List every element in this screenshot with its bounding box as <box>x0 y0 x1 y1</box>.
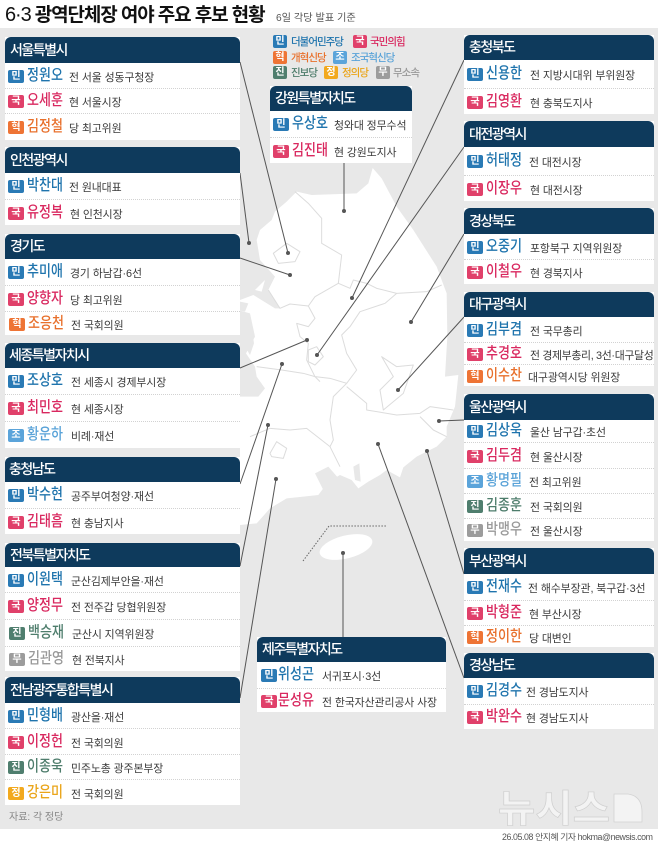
candidate: 이장우: 이장우 <box>486 180 522 196</box>
candidate: 김관영 <box>5 646 240 671</box>
candidate: 양향자: 당 최고위원 <box>70 294 123 306</box>
heading: 경기도 <box>5 234 240 259</box>
heading: 충청남도: 충청남도 <box>9 461 55 477</box>
candidate: 박찬대: 민 <box>11 181 21 192</box>
heading: 강원특별자치도: 강원특별자치도 <box>275 90 355 106</box>
candidate: 조상호 <box>8 372 166 389</box>
leader line: Chungbuk <box>350 60 464 300</box>
heading: 인천광역시: 인천광역시 <box>10 152 67 168</box>
candidate: 조상호: 조상호 <box>27 372 63 389</box>
candidate: 전재수 <box>467 578 645 595</box>
candidate: 백승재 <box>5 619 240 646</box>
candidate: 강은미: 정 <box>11 788 21 798</box>
candidate: 전재수: 민 <box>470 582 480 593</box>
candidate: 이수찬: 이수찬 <box>486 366 522 384</box>
heading: 전북특별자치도: 전북특별자치도 <box>10 547 90 563</box>
panel: 대전광역시 <box>464 121 654 201</box>
candidate: 박수현 <box>8 486 154 503</box>
leader line: Gyeonggi <box>240 258 292 277</box>
candidate: 이종욱: 진 <box>11 762 21 773</box>
legend: 정의당 <box>342 67 368 79</box>
candidate: 위성곤: 서귀포시·3선 <box>322 671 381 683</box>
candidate: 최민호 <box>5 394 240 421</box>
candidate: 오중기: 포항북구 지역위원장 <box>530 242 622 254</box>
heading: 서울특별시: 서울특별시 <box>10 42 67 58</box>
panel: 울산광역시 <box>464 394 654 541</box>
candidate: 문성유 <box>257 688 446 712</box>
candidate: 박형준: 박형준 <box>486 604 522 621</box>
candidate: 박찬대 <box>8 176 122 194</box>
legend: 정 <box>326 67 336 78</box>
candidate: 우상호: 민 <box>276 119 286 130</box>
candidate: 박맹우 <box>464 518 654 541</box>
candidate: 오중기 <box>467 238 622 254</box>
candidate: 박완수: 국 <box>470 712 480 723</box>
candidate: 김태흠: 현 충남지사 <box>71 518 124 530</box>
leader line: Seoul <box>240 62 290 255</box>
candidate: 김경수: 전 경남도지사 <box>526 687 588 699</box>
candidate: 박맹우: 전 울산시장 <box>530 526 583 538</box>
candidate: 이장우: 현 대전시장 <box>530 184 583 196</box>
candidate: 김관영: 김관영 <box>28 650 64 667</box>
candidate: 김영환 <box>464 88 654 114</box>
panel: 충청남도 <box>5 457 240 534</box>
candidate: 박형준: 국 <box>470 608 480 619</box>
panel: 제주특별자치도 <box>257 637 446 712</box>
legend: 조 <box>335 52 345 63</box>
candidate: 김부겸: 민 <box>470 324 480 336</box>
panel: 충청북도 <box>464 35 654 114</box>
panel: 강원특별자치도 <box>270 86 412 163</box>
heading: 전남광주통합특별시 <box>5 677 240 703</box>
candidate: 이수찬 <box>464 364 654 386</box>
panel: 전남광주통합특별시 <box>5 677 240 805</box>
candidate: 전재수: 전재수 <box>486 578 522 595</box>
candidate: 추경호: 추경호 <box>486 344 522 362</box>
heading: 충청남도 <box>5 457 240 482</box>
panel: 전북특별자치도 <box>5 543 240 671</box>
candidate: 박완수: 현 경남도지사 <box>526 713 588 725</box>
candidate: 양정무 <box>5 592 240 619</box>
candidate: 이철우: 이철우 <box>486 263 522 280</box>
heading: 세종특별자치시: 세종특별자치시 <box>9 347 89 363</box>
candidate: 오중기: 민 <box>470 242 480 252</box>
leader line: Jeonnam Gwangju <box>240 477 278 698</box>
candidate: 추경호: 국 <box>470 348 480 360</box>
candidate: 최민호: 국 <box>11 403 21 414</box>
leader line: Jeju <box>341 551 345 637</box>
candidate: 추미애 <box>8 263 142 280</box>
candidate: 민형배: 광산을·재선 <box>71 712 124 724</box>
heading: 강원특별자치도 <box>270 86 412 111</box>
heading: 경기도: 경기도 <box>10 238 44 254</box>
candidate: 강은미: 강은미 <box>27 784 63 800</box>
heading: 충청북도: 충청북도 <box>469 39 515 55</box>
heading: 경상북도 <box>464 208 654 234</box>
panel: 대구광역시 <box>464 292 654 386</box>
candidate: 정이한: 정이한 <box>486 628 522 644</box>
candidate: 조응천 <box>5 311 240 335</box>
legend: 조국혁신당 <box>351 52 394 64</box>
candidate: 조상호: 민 <box>11 376 21 387</box>
legend: 더불어민주당 <box>291 36 343 48</box>
candidate: 김상욱: 울산 남구갑·초선 <box>530 427 606 439</box>
heading: 울산광역시 <box>464 394 654 420</box>
candidate: 황운하 <box>5 421 240 448</box>
candidate: 김종훈: 전 국회의원 <box>530 502 583 514</box>
candidate: 오세훈: 국 <box>11 96 21 107</box>
candidate: 이수찬: 혁 <box>470 370 480 382</box>
candidate: 백승재: 군산시 지역위원장 <box>72 629 154 641</box>
candidate: 전재수: 전 해수부장관, 북구갑·3선 <box>528 583 645 595</box>
candidate: 조응천: 조응천 <box>28 314 64 332</box>
candidate: 김태흠: 국 <box>11 516 21 528</box>
candidate: 황운하: 조 <box>11 430 21 441</box>
panel: 경기도 <box>5 234 240 335</box>
panel: 부산광역시 <box>464 548 654 647</box>
candidate: 황명필 <box>464 468 654 493</box>
leader line: Daejeon <box>315 147 464 357</box>
candidate: 이장우: 국 <box>470 184 480 194</box>
candidate: 이철우: 현 경북지사 <box>530 268 583 280</box>
candidate: 위성곤: 위성곤 <box>278 666 314 683</box>
candidate: 박찬대: 박찬대 <box>27 177 63 194</box>
candidate: 황명필: 전 최고위원 <box>529 477 582 489</box>
legend: 개혁신당 <box>291 52 326 64</box>
candidate: 허태정: 허태정 <box>486 152 522 169</box>
subtitle: date basis: 6일 각당 발표 기준 <box>276 13 356 24</box>
candidate: 김태흠 <box>5 508 240 534</box>
candidate: 김상욱: 김상욱 <box>486 422 522 439</box>
candidate: 이정헌: 이정헌 <box>27 732 63 750</box>
heading: 경상남도 <box>464 653 654 678</box>
candidate: 정원오: 전 서울 성동구청장 <box>69 72 154 84</box>
candidate: 신용한: 전 지방시대위 부위원장 <box>530 70 635 82</box>
candidate: 오세훈 <box>5 88 240 113</box>
heading: 충청북도 <box>464 35 654 60</box>
candidate: 우상호: 청와대 정무수석 <box>334 120 406 132</box>
watermark: Newsis logo: 뉴시스 <box>498 789 610 831</box>
heading: 부산광역시 <box>464 548 654 574</box>
heading: 경상남도: 경상남도 <box>469 657 515 673</box>
legend: 진보당 <box>291 67 317 79</box>
leader line: Gyeongnam <box>376 442 464 678</box>
candidate: 김부겸 <box>467 320 583 338</box>
candidate: 최민호: 현 세종시장 <box>71 404 124 416</box>
candidate: 김경수: 민 <box>470 686 480 697</box>
candidate: 추경호 <box>464 342 654 364</box>
candidate: 김정철 <box>5 113 240 140</box>
leader line: Daegu <box>396 317 464 392</box>
title: 6·3 광역단체장 여야 주요 후보 현황 <box>5 4 264 26</box>
candidate: 김태흠: 김태흠 <box>27 512 63 530</box>
candidate: 이정헌: 국 <box>11 736 21 748</box>
leader line: Chungnam <box>240 362 284 484</box>
heading: 제주특별자치도: 제주특별자치도 <box>262 641 342 657</box>
panel: 경상북도 <box>464 208 654 284</box>
candidate: 김진태: 현 강원도지사 <box>334 146 396 158</box>
candidate: 이종욱: 민주노총 광주본부장 <box>71 763 163 775</box>
candidate: 민형배: 민형배 <box>27 706 63 724</box>
candidate: 조응천: 전 국회의원 <box>71 320 124 332</box>
candidate: 강은미: 전 국회의원 <box>71 788 124 800</box>
candidate: 양정무: 양정무 <box>27 597 63 614</box>
panel: 경상남도 <box>464 653 654 729</box>
candidate: 김두겸 <box>464 442 654 468</box>
candidate: 정원오 <box>8 66 154 84</box>
candidate: 정원오: 정원오 <box>27 66 63 84</box>
candidate: 박형준 <box>464 600 654 625</box>
candidate: 이원택: 이원택 <box>27 570 63 588</box>
candidate: 김진태: 김진태 <box>292 142 328 158</box>
candidate: 김진태: 국 <box>276 146 286 156</box>
candidate: 이장우 <box>464 175 654 201</box>
candidate: 박완수 <box>464 704 654 729</box>
source note: 자료: 각 정당 <box>9 812 63 823</box>
candidate: 민형배: 민 <box>11 710 21 722</box>
leader line: Jeonbuk <box>240 423 270 566</box>
candidate: 이수찬: 대구광역시당 위원장 <box>528 372 620 384</box>
candidate: 이정헌: 전 국회의원 <box>71 738 124 750</box>
candidate: 위성곤 <box>261 666 381 683</box>
candidate: 양정무: 국 <box>11 601 21 612</box>
candidate: 정이한 <box>464 625 654 647</box>
map of South Korea <box>240 168 458 525</box>
candidate: 김정철: 김정철 <box>27 118 63 135</box>
candidate: 양향자: 양향자 <box>27 290 63 306</box>
candidate: 허태정: 전 대전시장 <box>529 157 582 169</box>
candidate: 정이한: 혁 <box>470 632 480 642</box>
legend: 진 <box>275 67 285 78</box>
candidate: 양정무: 전 전주갑 당협위원장 <box>71 602 166 614</box>
candidate: 유정복: 현 인천시장 <box>70 208 123 220</box>
candidate: 추미애: 경기 하남갑·6선 <box>70 268 142 280</box>
candidate: 김진태 <box>270 137 412 163</box>
candidate: 신용한: 민 <box>470 69 480 80</box>
candidate: 정이한: 당 대변인 <box>529 632 572 644</box>
candidate: 오세훈: 오세훈 <box>27 92 63 109</box>
heading: 대구광역시: 대구광역시 <box>469 296 526 312</box>
heading: 대구광역시 <box>464 292 654 317</box>
candidate: 박완수: 박완수 <box>486 708 522 725</box>
panel: 세종특별자치시 <box>5 343 240 448</box>
candidate: 김두겸: 국 <box>470 450 480 462</box>
heading: 울산광역시: 울산광역시 <box>469 399 526 415</box>
candidate: 우상호: 우상호 <box>292 115 328 132</box>
heading: 전남광주통합특별시: 전남광주통합특별시 <box>10 682 112 698</box>
legend: 혁 <box>275 52 285 63</box>
leader line: Gyeongbuk <box>409 234 464 324</box>
candidate: 이종욱: 이종욱 <box>27 758 63 775</box>
candidate: 조상호: 전 세종시 경제부시장 <box>71 377 166 389</box>
panel: 서울특별시 <box>5 37 240 140</box>
candidate: 오중기: 오중기 <box>486 238 522 254</box>
leader line: Ulsan <box>437 419 464 423</box>
map: Jeju inset dotted boundary <box>303 526 386 561</box>
candidate: 황명필: 조 <box>470 476 480 487</box>
candidate: 김정철: 당 최고위원 <box>69 123 122 135</box>
candidate: 민형배 <box>8 706 124 724</box>
map: Jeju island <box>317 529 375 565</box>
candidate: 문성유: 전 한국자산관리공사 사장 <box>322 696 437 708</box>
candidate: 이원택: 군산김제부안을·재선 <box>71 576 164 588</box>
candidate: 박형준: 현 부산시장 <box>529 609 582 621</box>
legend <box>273 35 420 79</box>
candidate: 김부겸: 김부겸 <box>486 320 522 338</box>
candidate: 오세훈: 현 서울시장 <box>69 97 122 109</box>
candidate: 양향자 <box>5 285 240 311</box>
candidate: 이원택 <box>8 570 164 588</box>
candidate: 정원오: 민 <box>11 70 21 82</box>
candidate: 추미애: 민 <box>11 267 21 278</box>
candidate: 박수현: 민 <box>11 490 21 501</box>
candidate: 김경수: 김경수 <box>486 682 522 699</box>
heading: 전북특별자치도 <box>5 543 240 567</box>
candidate: 김종훈: 김종훈 <box>486 497 522 514</box>
candidate: 박맹우: 박맹우 <box>486 521 522 538</box>
candidate: 김정철: 혁 <box>11 122 21 133</box>
candidate: 황운하: 비례·재선 <box>71 431 114 443</box>
heading: 세종특별자치시 <box>5 343 240 368</box>
panel: 인천광역시 <box>5 147 240 225</box>
heading: 제주특별자치도 <box>257 637 446 662</box>
candidate: 허태정 <box>467 152 582 169</box>
candidate: 유정복 <box>5 199 240 225</box>
leader line: Gangwon <box>342 163 346 213</box>
candidate: 김경수 <box>467 682 588 699</box>
candidate: 위성곤: 민 <box>264 670 274 681</box>
candidate: 이철우 <box>464 259 654 284</box>
heading: 경상북도: 경상북도 <box>469 213 515 229</box>
candidate: 김두겸: 현 울산시장 <box>530 452 583 464</box>
candidate: 신용한 <box>467 65 635 82</box>
candidate: 강은미 <box>5 779 240 805</box>
heading: 인천광역시 <box>5 147 240 173</box>
leader line: Busan <box>425 449 464 574</box>
candidate: 신용한: 신용한 <box>486 65 522 82</box>
candidate: 이종욱 <box>5 754 240 779</box>
candidate: 김영환: 현 충북도지사 <box>530 98 592 110</box>
heading: 서울특별시 <box>5 37 240 63</box>
heading: 대전광역시: 대전광역시 <box>469 126 526 142</box>
heading: 대전광역시 <box>464 121 654 147</box>
legend: 무 <box>378 67 388 78</box>
candidate: 김종훈: 진 <box>470 501 480 512</box>
legend: 국민의힘 <box>370 36 405 48</box>
candidate: 허태정: 민 <box>470 156 480 167</box>
candidate: 김상욱: 민 <box>470 426 480 437</box>
candidate: 이원택: 민 <box>11 574 21 586</box>
leader line: Sejong <box>240 338 309 368</box>
candidate: 추경호: 전 경제부총리, 3선·대구달성 <box>530 350 653 362</box>
heading: 부산광역시: 부산광역시 <box>469 553 526 569</box>
candidate: 박수현: 박수현 <box>27 486 63 503</box>
candidate: 김부겸: 전 국무총리 <box>530 326 583 338</box>
candidate: 황운하: 황운하 <box>27 426 63 443</box>
candidate: 김두겸: 김두겸 <box>486 446 522 464</box>
candidate: 박맹우: 무 <box>470 525 480 536</box>
candidate: 김관영: 무 <box>12 654 22 665</box>
candidate: 문성유: 국 <box>264 696 274 706</box>
candidate: 양향자: 국 <box>11 294 21 304</box>
candidate: 김영환: 김영환 <box>486 92 522 110</box>
candidate: 김관영: 현 전북지사 <box>72 655 125 667</box>
legend: 무소속 <box>393 67 419 79</box>
legend: 국 <box>355 36 365 47</box>
leader line: Incheon <box>240 173 251 245</box>
candidate: 조응천: 혁 <box>12 318 22 330</box>
candidate: 황명필: 황명필 <box>486 472 522 489</box>
candidate: 문성유: 문성유 <box>278 692 314 708</box>
candidate: 최민호: 최민호 <box>27 399 63 416</box>
candidate: 백승재: 진 <box>12 628 22 639</box>
legend: 민 <box>275 36 285 47</box>
candidate: 김종훈 <box>464 493 654 518</box>
credit: 26.05.08 안지혜 기자 hokma@newsis.com <box>502 832 653 842</box>
candidate: 유정복: 국 <box>11 208 21 218</box>
candidate: 김영환: 국 <box>470 96 480 108</box>
candidate: 박찬대: 전 원내대표 <box>69 182 122 194</box>
candidate: 이정헌 <box>5 728 240 754</box>
candidate: 백승재: 백승재 <box>28 624 64 641</box>
candidate: 우상호 <box>273 115 406 132</box>
candidate: 김상욱 <box>467 422 606 439</box>
candidate: 박수현: 공주부여청양·재선 <box>71 491 154 503</box>
candidate: 이철우: 국 <box>470 267 480 278</box>
candidate: 추미애: 추미애 <box>27 263 63 280</box>
candidate: 유정복: 유정복 <box>27 204 63 220</box>
